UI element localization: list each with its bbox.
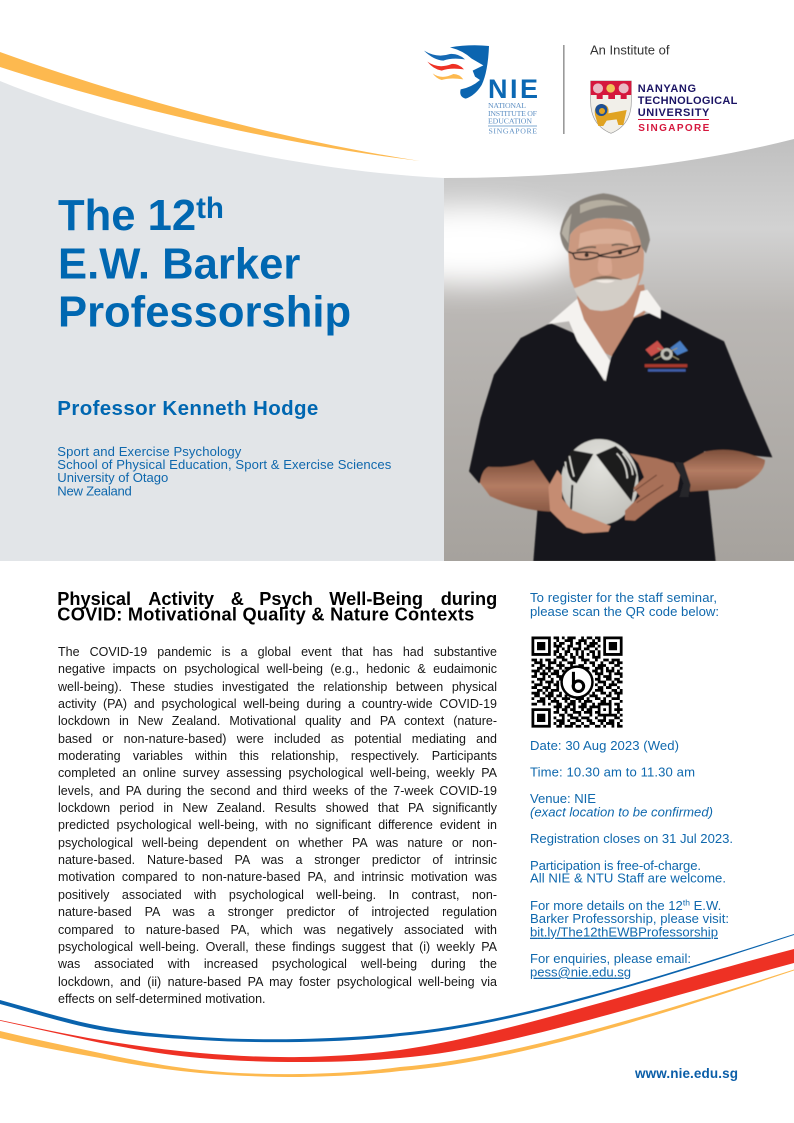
- abstract text: psychological well-being dependent on whether PA was nature or non-: [58, 836, 497, 850]
- registration instructions: [530, 590, 719, 619]
- NIE full name: NATIONAL: [488, 101, 526, 110]
- abstract text: negative impacts on psychological well-being (e.g., hedonic & eudaimonic: [58, 662, 497, 676]
- left hand: [548, 470, 611, 533]
- orange top swoosh: [0, 52, 420, 161]
- abstract text: was associated with increased psychological well-being during the: [58, 957, 497, 971]
- collar: [548, 299, 610, 381]
- abstract text: lockdown, and (ii) nature-based PA may foster psychological well-being via: [58, 975, 497, 989]
- watch: [675, 462, 691, 497]
- abstract text: psychological well-being. Overall, these findings suggest that (i) weekly PA: [58, 940, 497, 954]
- QR code: [530, 635, 624, 729]
- NIE full name: [488, 101, 538, 136]
- right forearm: [683, 450, 765, 492]
- event details: Venue: NIE: [530, 791, 596, 806]
- event details: E.W.: [690, 898, 721, 913]
- speaker name: Professor Kenneth Hodge: [57, 397, 318, 420]
- event details: Barker Professorship, please visit:: [530, 911, 729, 926]
- abstract text: nature-based PA was a stronger predictor of introjected regulation: [58, 905, 497, 919]
- abstract text: [58, 645, 497, 1006]
- icon: QR centre bitly mark: [562, 667, 592, 697]
- NTU wordmark: NANYANG: [638, 83, 696, 95]
- NIE full name: EDUCATION: [488, 116, 532, 126]
- abstract text: based or non-nature-based) were included as potential mediating and: [58, 732, 497, 746]
- NTU wordmark: TECHNOLOGICAL: [638, 95, 738, 107]
- title: [58, 192, 351, 337]
- title: E.W. Barker: [58, 240, 300, 288]
- photo: Professor Kenneth Hodge holding a rugby ball: [444, 139, 794, 561]
- abstract text: lockdown period in New Zealand. Results showed that PA significantly: [58, 801, 497, 815]
- seminar heading: COVID: Motivational Quality & Nature Contexts: [57, 605, 474, 625]
- moustache and smile: [588, 276, 623, 281]
- bottom swoosh: blue: [0, 934, 794, 1042]
- right hand: [625, 453, 680, 521]
- skin: neck: [577, 285, 647, 356]
- event details: pess@nie.edu.sg: [530, 965, 631, 980]
- abstract text: positively associated with psychological well-being. In contrast, non-: [58, 888, 497, 902]
- abstract text: The COVID-19 pandemic is a global event that has had substantive: [58, 645, 497, 659]
- seminar heading: &: [231, 589, 244, 609]
- logo: NTU: [591, 81, 738, 134]
- beard: [574, 273, 639, 311]
- arms, ball and hands: [480, 439, 765, 533]
- speaker affiliation: University of Otago: [57, 470, 168, 485]
- eyebrows: [577, 244, 628, 251]
- logo divider: [563, 45, 565, 134]
- event details: Registration closes on 31 Jul 2023.: [530, 831, 733, 846]
- event details: th: [683, 898, 690, 908]
- icon: NIE lion shield: [450, 45, 489, 99]
- seminar heading: [57, 589, 497, 625]
- speaker affiliation: School of Physical Education, Sport & Exercise Sciences: [57, 457, 392, 472]
- abstract text: levels, and PA during the second and third weeks of the 7-week COVID-19: [58, 784, 497, 798]
- abstract text: completed an online survey assessing psychological well-being, weekly PA: [58, 766, 497, 780]
- registration instructions: please scan the QR code below:: [530, 604, 719, 619]
- abstract text: well-being). These studies investigated the relationship between physical: [58, 680, 497, 694]
- rugby ball: [561, 439, 638, 525]
- icon: NIE flag waves: [424, 51, 465, 61]
- abstract text: nature-based. Nature-based PA was a stronger predictor of intrinsic: [58, 853, 497, 867]
- abstract text: motivation compared to non-nature-based PA, and intrinsic motivation was: [58, 870, 497, 884]
- speaker affiliation: New Zealand: [57, 484, 132, 498]
- title: Professorship: [58, 289, 351, 337]
- event details: For more details on the 12: [530, 898, 683, 913]
- event details: bit.ly/The12thEWBProfessorship: [530, 925, 718, 940]
- event details: Time: 10.30 am to 11.30 am: [530, 765, 695, 780]
- event details: [530, 738, 733, 980]
- hair: [560, 193, 650, 253]
- shirt: [469, 310, 772, 561]
- abstract text: moderating variables within this relationship, respectively. Participants: [58, 749, 497, 763]
- bottom swoosh: red: [0, 949, 794, 1062]
- seminar heading: Activity: [148, 589, 215, 609]
- NIE full name: SINGAPORE: [488, 126, 537, 136]
- NIE letters: NIE: [488, 74, 538, 104]
- head: [560, 193, 650, 311]
- event details: (exact location to be confirmed): [530, 805, 713, 820]
- registration instructions: To register for the staff seminar,: [530, 590, 717, 605]
- seminar heading: Well-Being: [329, 589, 423, 609]
- glasses: [568, 246, 640, 260]
- abstract text: compared to nature-based PA, which was negatively associated with: [58, 922, 497, 936]
- left forearm: [480, 460, 552, 512]
- text: An Institute of: An Institute of: [590, 42, 670, 58]
- logo: NTU: SINGAPORE: [638, 123, 710, 134]
- event details: Date: 30 Aug 2023 (Wed): [530, 738, 679, 753]
- abstract text: predicted psychological well-being, with no significant difference evident in: [58, 818, 497, 832]
- bottom swoosh: orange: [0, 970, 794, 1077]
- event details: All NIE & NTU Staff are welcome.: [530, 871, 726, 886]
- NTU wordmark: [638, 83, 738, 119]
- face: [568, 218, 644, 310]
- website address: www.nie.edu.sg: [634, 1066, 738, 1081]
- chest badge: [645, 341, 664, 356]
- event details: For enquiries, please email:: [530, 951, 691, 966]
- abstract text: lockdown in New Zealand. Motivational quality and PA context (nature-: [58, 714, 497, 728]
- icon: NTU crest: [591, 81, 631, 133]
- NTU wordmark: UNIVERSITY: [638, 107, 710, 119]
- speaker affiliation: Sport and Exercise Psychology: [57, 444, 242, 459]
- seminar heading: Psych: [259, 589, 313, 609]
- seminar heading: Physical: [57, 589, 131, 609]
- title: th: [196, 192, 224, 225]
- speaker affiliation: [57, 444, 392, 498]
- seminar heading: during: [441, 589, 497, 609]
- NIE full name: INSTITUTE OF: [488, 109, 538, 118]
- abstract text: effects on self-determined motivation.: [58, 992, 266, 1006]
- panel: grey header background: [0, 81, 444, 561]
- abstract text: activity (PA) and psychological well-being during a country-wide COVID-19: [58, 697, 497, 711]
- title: The 12: [58, 192, 196, 240]
- logo: NIE: [424, 45, 538, 136]
- event details: Participation is free-of-charge.: [530, 858, 701, 873]
